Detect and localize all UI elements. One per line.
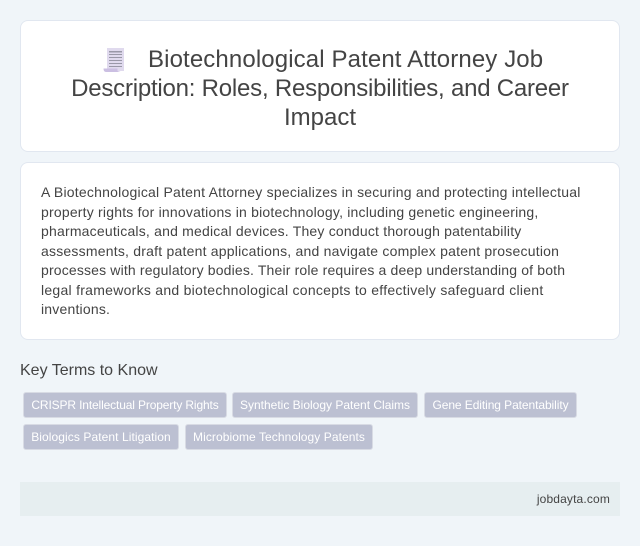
title: Impact bbox=[284, 104, 356, 131]
description text bbox=[41, 184, 581, 317]
tag: Microbiome Technology Patents bbox=[193, 430, 365, 444]
title card bbox=[20, 20, 620, 152]
title bbox=[71, 46, 569, 131]
tag: Gene Editing Patentability bbox=[432, 398, 568, 412]
tag: Biologics Patent Litigation bbox=[31, 430, 171, 444]
tag bbox=[185, 424, 373, 450]
tag list bbox=[23, 392, 577, 450]
title: Description: Roles, Responsibilities, and Career bbox=[71, 75, 569, 102]
description text: property rights for innovations in biotechnology, including genetic engineering, bbox=[41, 204, 538, 220]
tag bbox=[23, 392, 227, 418]
description text: A Biotechnological Patent Attorney specializes in securing and protecting intellectual bbox=[41, 184, 581, 200]
tag: Synthetic Biology Patent Claims bbox=[240, 398, 410, 412]
description text: pharmaceuticals, and medical devices. They conduct thorough patentability bbox=[41, 223, 522, 239]
description card bbox=[20, 162, 620, 340]
footer source: jobdayta.com bbox=[537, 492, 610, 506]
tag bbox=[23, 424, 179, 450]
description text: assessments, draft patent applications, and navigate complex patent prosecution bbox=[41, 242, 559, 258]
tag bbox=[232, 392, 418, 418]
description text: legal frameworks and biotechnological concepts to effectively safeguard client bbox=[41, 282, 544, 298]
description text: processes with regulatory bodies. Their role requires a deep understanding of both bbox=[41, 262, 565, 278]
heading: key terms: Key Terms to Know bbox=[20, 362, 158, 379]
footer bar bbox=[20, 482, 620, 516]
title: Biotechnological Patent Attorney Job bbox=[148, 46, 543, 73]
description text: inventions. bbox=[41, 301, 110, 317]
tag bbox=[424, 392, 577, 418]
tag: CRISPR Intellectual Property Rights bbox=[31, 398, 219, 412]
icon: patent document scroll bbox=[104, 48, 124, 72]
